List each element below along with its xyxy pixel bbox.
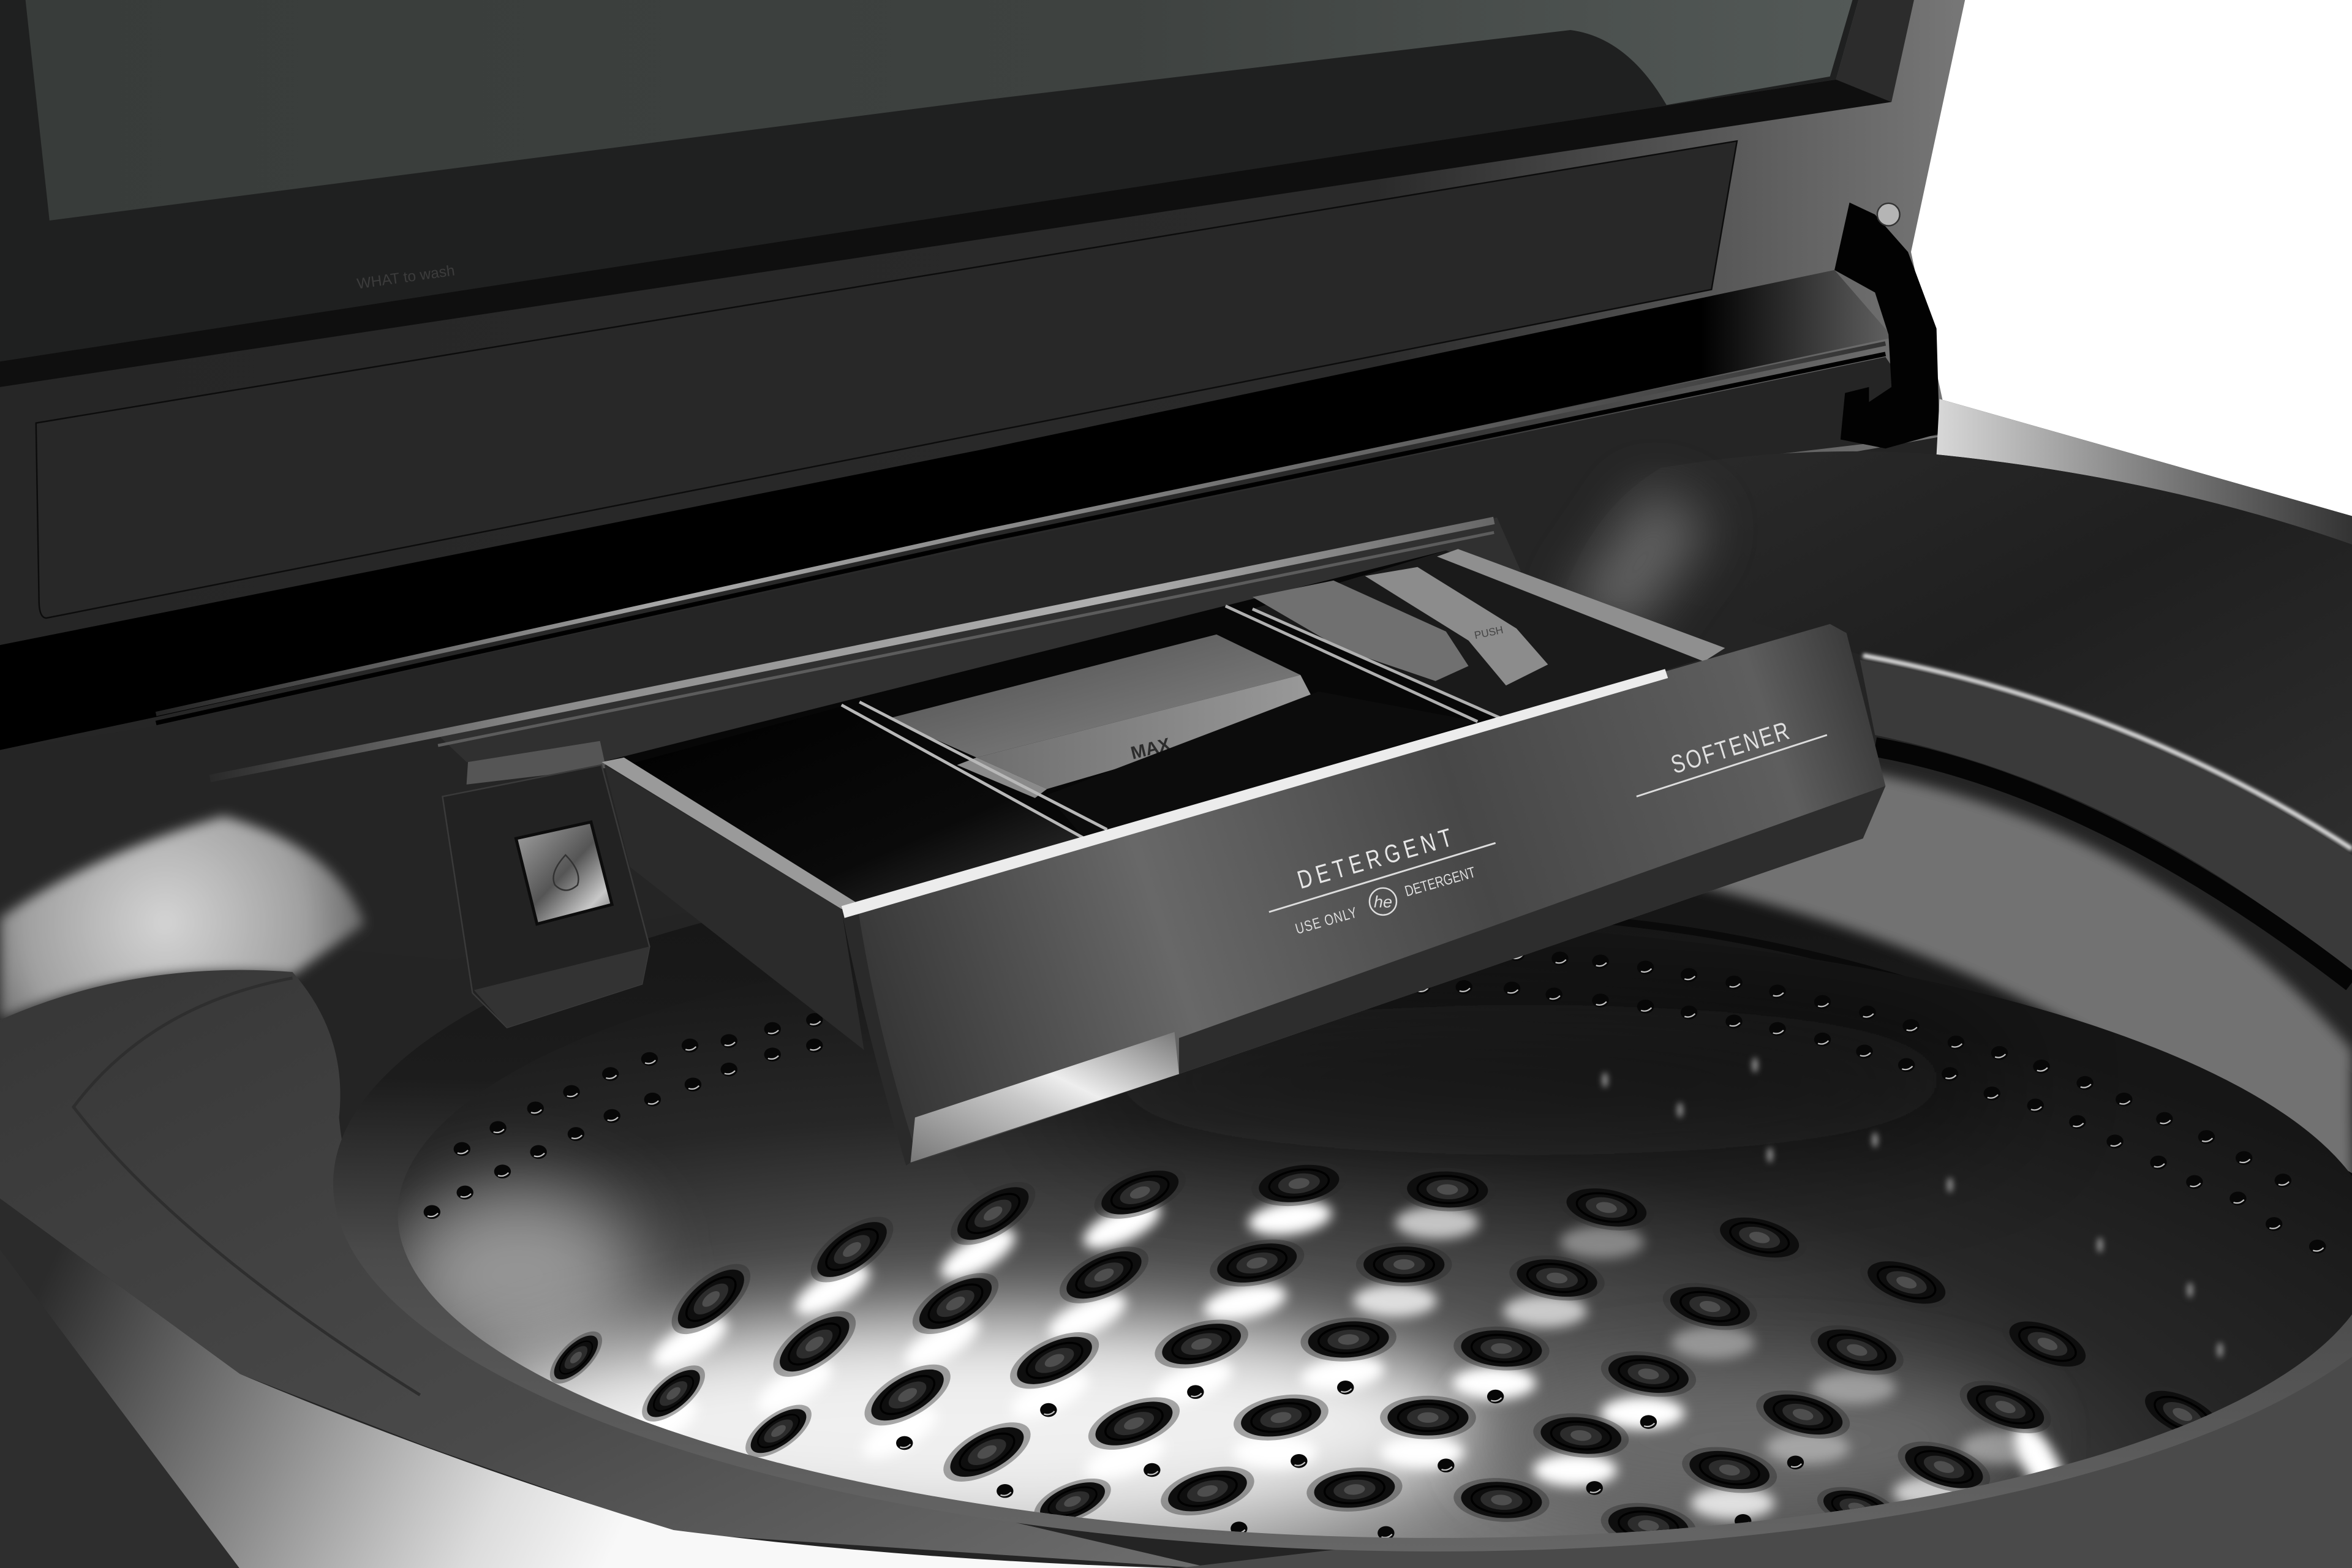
lid faint label: WHAT to wash [356,262,456,293]
dim dimple reflections [1560,1226,2045,1464]
bright dimple reflections [616,1193,2075,1520]
panel: left deck highlight [0,816,364,1020]
drawer side wall [605,765,864,1050]
he logo [1370,888,1396,915]
left strip [842,909,918,1166]
drum wall perforations right [1414,947,2326,1253]
softener compartment [1253,551,1704,718]
icon: screw [1877,203,1900,226]
panel: drum interior [398,952,2352,1538]
drum floor drain holes [896,1381,1804,1540]
left compartment well [625,706,1085,905]
front shading [842,786,1885,1166]
floor right tone [1485,1373,2025,1507]
PUSH label: PUSH [1473,624,1504,641]
he logo: he [1374,893,1392,911]
deck top right [1937,399,2352,545]
divider two [1226,606,1501,722]
front top edge [842,669,1668,918]
detergent insert front [976,675,1319,789]
lid glass frame [1836,0,1914,102]
front right surface [1170,1320,2352,1568]
black rim stripe [1875,747,2352,982]
push tab [1365,567,1548,685]
band gloss [156,344,1885,714]
center floor [1047,692,1477,839]
insert lip [957,758,1047,798]
icon: water drop button [516,822,612,924]
rail lower stripe [438,532,1494,745]
MAX label: MAX [1129,734,1173,764]
drum edge stripes [1575,918,2352,1177]
floor light [465,1320,1485,1530]
lip chevron line [74,978,420,1395]
panel: light front surface [0,1199,1215,1568]
panel: left bowl lip [0,970,1215,1568]
small DETERGENT label: DETERGENT [1403,864,1477,900]
icon: hinge arm [1834,203,1940,448]
rim under-shade [1860,660,2352,975]
softener underline [1637,735,1827,796]
drawer back rail [210,518,1521,785]
panel: right bowl [1560,451,2352,855]
wall dark band [1050,1005,2010,1155]
detergent insert top [888,635,1300,758]
lid dark glass edge [0,0,1858,361]
housing lower facet [474,946,649,1028]
drum floor dimples [541,1155,2235,1554]
lower facet [1179,786,1885,1074]
front left corner [0,1250,240,1568]
band gloss shadow [156,354,1885,723]
washer body base [0,399,2352,1568]
left rail [601,758,859,909]
DETERGENT label: DETERGENT [1294,823,1455,894]
right rail [1437,549,1725,662]
SOFTENER label: SOFTENER [1667,716,1792,779]
drum wall perforations left [424,1013,823,1219]
drawer front face [842,624,1885,1166]
bowl highlight [1567,488,1710,638]
panel: button housing [442,765,649,1028]
divider one [842,702,1107,839]
panel: dispenser drawer [601,549,1885,1166]
glass lower edge [0,80,1891,387]
ring gray upper right [1695,758,2352,1245]
black band [0,270,1893,750]
lid glass window [26,0,1852,221]
rail tab [467,741,606,785]
chrome bracket [911,1032,1179,1163]
bowl rim shine [1863,655,2352,849]
rail chrome stripe [210,521,1494,778]
softener insert [1253,581,1469,681]
deck under lid [0,357,1940,960]
drawer interior [601,551,1704,909]
USE ONLY label: USE ONLY [1294,903,1359,938]
drum outer ring [327,831,2352,1568]
lid inner panel [36,141,1737,618]
wall shine left [398,1185,638,1365]
label underline [1269,843,1496,912]
water glints [1602,1058,2223,1357]
panel: open lid [0,0,1965,780]
